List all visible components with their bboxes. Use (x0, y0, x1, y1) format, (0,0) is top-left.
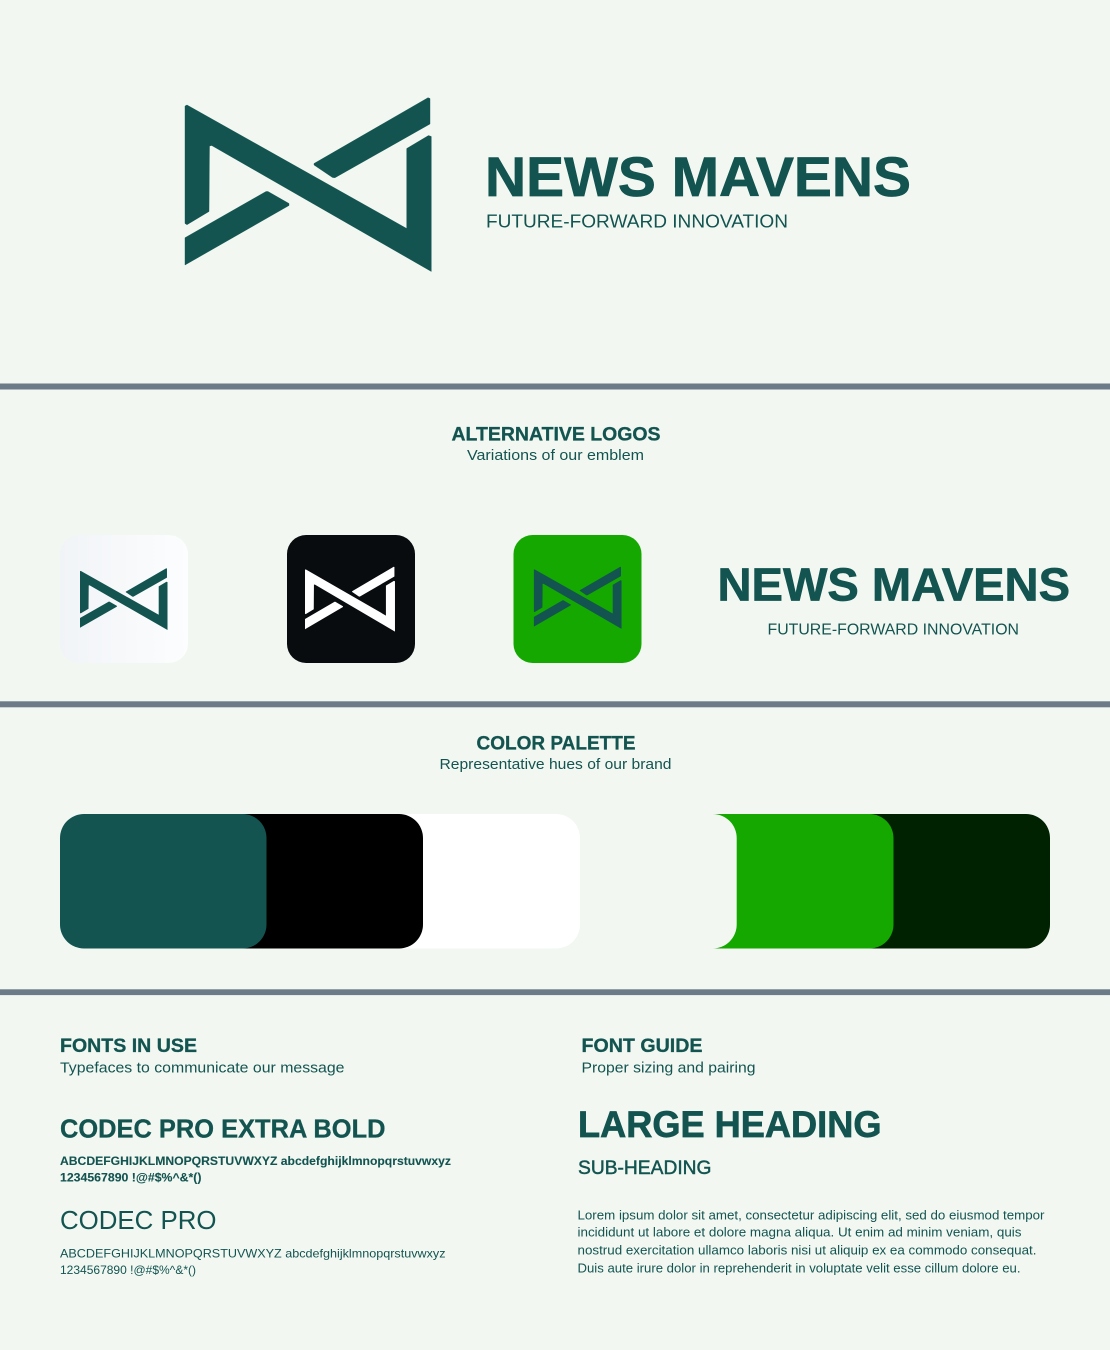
subheading: typefaces: Typefaces to communicate our message (60, 1059, 344, 1076)
subheading: palette: Representative hues of our brand (440, 756, 672, 773)
icon: emblem on green tile (514, 535, 642, 663)
specimen title: regular: CODEC PRO (60, 1205, 216, 1235)
sample: body paragraph: Duis aute irure dolor in reprehenderit in voluptate velit esse cillum dolore eu. (578, 1260, 1020, 1275)
panel: fonts in use (60, 1036, 451, 1277)
subheading: sizing: Proper sizing and pairing (582, 1059, 756, 1076)
sample: body paragraph: nostrud exercitation ullamco laboris nisi ut aliquip ex ea commodo consequat. (578, 1242, 1036, 1257)
panel: color palette (60, 733, 1050, 948)
swatch: black (220, 814, 423, 948)
sample: body paragraph: incididunt ut labore et dolore magna aliqua. Ut enim ad minim veniam, quis (578, 1224, 1022, 1239)
panel: font guide (578, 1036, 1045, 1275)
heading: font guide: FONT GUIDE (582, 1036, 702, 1057)
wordmark: NEWS MAVENS (485, 145, 911, 208)
heading: fonts in use: FONTS IN USE (60, 1036, 197, 1057)
icon: emblem on white tile (60, 535, 188, 663)
swatch: teal (60, 814, 266, 948)
tagline: stacked logo: FUTURE-FORWARD INNOVATION (768, 621, 1019, 638)
specimen title: extra bold: CODEC PRO EXTRA BOLD (60, 1115, 386, 1143)
heading: alternative logos: ALTERNATIVE LOGOS (452, 424, 660, 445)
wordmark: stacked logo: NEWS MAVENS (718, 558, 1070, 610)
swatch: white (380, 814, 580, 948)
specimen: bold numerals: 1234567890 !@#$%^&*() (60, 1170, 202, 1184)
swatch: very dark green (840, 814, 1050, 948)
panel: alternative logos (60, 424, 1070, 663)
swatch: pale background tint (540, 814, 737, 948)
specimen: regular alphabet: ABCDEFGHIJKLMNOPQRSTUVWXYZ abcdefghijklmnopqrstuvwxyz (60, 1246, 445, 1260)
specimen: regular numerals: 1234567890 !@#$%^&*() (60, 1263, 196, 1277)
heading: color palette: COLOR PALETTE (476, 733, 636, 754)
sample: body paragraph: Lorem ipsum dolor sit amet, consectetur adipiscing elit, sed do eiusmod tempor (578, 1207, 1045, 1222)
icon: main emblem (185, 98, 431, 272)
sample: sub-heading: SUB-HEADING (578, 1158, 712, 1179)
sample: body paragraph (578, 1207, 1045, 1275)
sample: large heading: LARGE HEADING (578, 1104, 882, 1145)
subheading: variations: Variations of our emblem (467, 447, 644, 464)
swatch: bright green (680, 814, 894, 948)
panel: primary logo (185, 98, 911, 272)
icon: emblem on black tile (287, 535, 415, 663)
tagline: FUTURE-FORWARD INNOVATION (486, 211, 788, 231)
specimen: bold alphabet: ABCDEFGHIJKLMNOPQRSTUVWXYZ abcdefghijklmnopqrstuvwxyz (60, 1154, 451, 1168)
